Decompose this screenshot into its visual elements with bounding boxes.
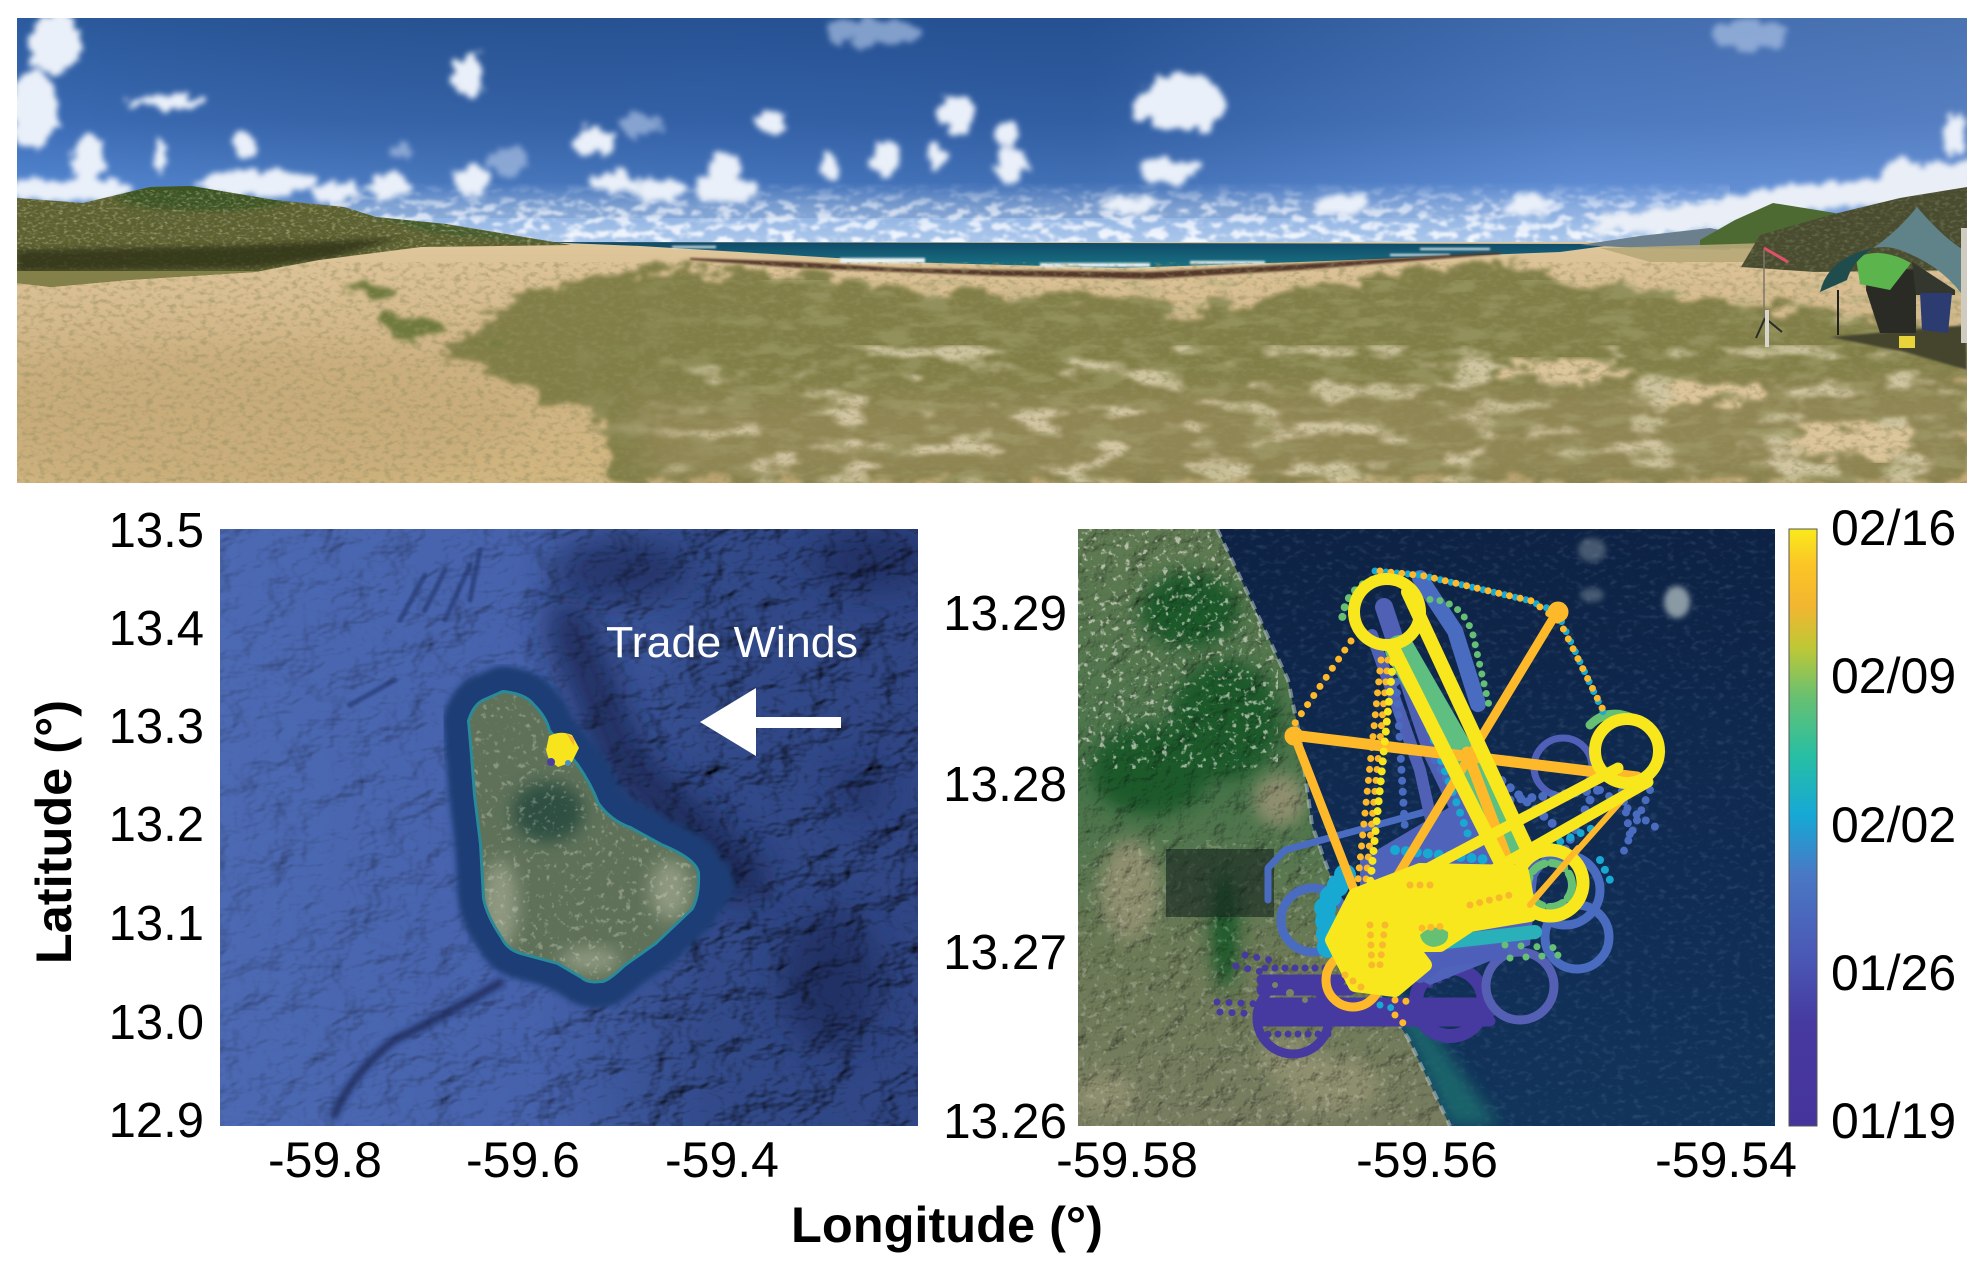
grass meadow	[440, 263, 1967, 483]
cyan halo west	[1325, 875, 1345, 950]
northern ridge fan	[350, 550, 480, 705]
right scrub slope	[1730, 180, 1970, 275]
orange tracks	[1285, 602, 1640, 1025]
right-hand cloud bank	[1590, 156, 1975, 232]
seafloor background	[220, 529, 918, 1126]
ocean background	[1078, 529, 1775, 1126]
lower-left sand tone	[20, 370, 478, 459]
ocean	[540, 242, 1620, 268]
small grass patches	[338, 280, 510, 351]
southern settlements	[1078, 840, 1418, 1126]
surf	[672, 246, 1490, 267]
green tracks	[1342, 580, 1640, 958]
blue fringe below mass	[1420, 952, 1500, 975]
occupants	[1866, 265, 1916, 333]
dark mottling	[560, 280, 1967, 483]
right interior	[1912, 262, 1955, 295]
east tip light	[650, 860, 690, 920]
land shading	[1078, 529, 1478, 1126]
left map latitude ticks: 13.1	[109, 897, 204, 951]
west coast light	[482, 860, 518, 950]
south-west ridge	[333, 981, 503, 1118]
chair	[1920, 293, 1952, 333]
colour bar	[1789, 529, 1817, 1126]
y-axis title: Latitude (°)	[25, 700, 82, 964]
island coastal teal	[470, 693, 697, 980]
left map latitude ticks: 12.9	[109, 1094, 204, 1148]
lower meadow tone	[620, 380, 1967, 483]
tent shadow	[1829, 325, 1967, 370]
person	[1961, 228, 1967, 343]
colour bar date labels	[1831, 500, 1956, 1149]
colour bar date labels: 02/09	[1831, 648, 1956, 704]
cyan and teal tracks	[1325, 730, 1610, 1010]
purple band	[1262, 980, 1490, 1021]
dark seafloor zone	[550, 530, 930, 1050]
surf line	[1217, 529, 1450, 1126]
left map latitude ticks: 13.0	[109, 996, 204, 1050]
sky tone variation	[17, 18, 1967, 218]
right map longitude ticks	[1056, 1132, 1797, 1188]
interior forest	[512, 782, 584, 842]
dark tile	[1166, 849, 1274, 917]
right map longitude ticks: -59.58	[1056, 1132, 1198, 1188]
land	[1075, 529, 1478, 1126]
sand patches in grass	[1500, 362, 1910, 458]
colour bar date labels: 01/26	[1831, 945, 1956, 1001]
dark panel	[1820, 248, 1873, 292]
sandy mottling	[560, 345, 1967, 483]
right map latitude ticks: 13.27	[943, 925, 1067, 980]
blue loops	[1268, 578, 1660, 1020]
right green hill	[1700, 203, 1860, 250]
colour bar date labels: 02/02	[1831, 797, 1956, 853]
arrow: wind direction	[700, 688, 841, 756]
right map latitude ticks: 13.26	[943, 1094, 1067, 1149]
lobe interior	[1420, 928, 1448, 947]
outer survey polygon, dotted	[1295, 571, 1606, 880]
left map latitude ticks: 13.4	[109, 602, 204, 656]
orange dots over yellow mass	[1345, 885, 1510, 990]
ground	[17, 242, 1967, 483]
teal shallows	[1372, 985, 1500, 1126]
hill base shadow	[17, 238, 400, 272]
dark-green crest	[115, 183, 295, 211]
ground texture	[17, 262, 1967, 483]
right map latitude ticks: 13.29	[943, 586, 1067, 641]
left map longitude ticks: -59.4	[665, 1132, 779, 1188]
crest to headland	[330, 204, 570, 246]
land gaps in purple cluster	[1272, 982, 1308, 1003]
dense blue fill	[1360, 795, 1540, 985]
ring interior colour	[1420, 848, 1578, 947]
left map longitude ticks: -59.8	[268, 1132, 382, 1188]
right map longitude ticks: -59.56	[1356, 1132, 1498, 1188]
hill fringe	[17, 271, 257, 289]
flight tracks	[1217, 571, 1660, 1054]
right map longitude ticks: -59.54	[1655, 1132, 1797, 1188]
colour bar date labels: 02/16	[1831, 500, 1956, 556]
tent canopy	[1873, 207, 1967, 300]
left map latitude ticks: 13.3	[109, 700, 204, 754]
forest	[1090, 572, 1280, 990]
left map latitude ticks	[109, 504, 204, 1148]
purple tracks	[1217, 955, 1490, 1054]
left map latitude ticks: 13.2	[109, 798, 204, 852]
sea clouds	[1578, 538, 1690, 618]
faint high clouds	[389, 19, 1790, 175]
x-axis title: Longitude (°)	[791, 1196, 1103, 1253]
villages	[1078, 529, 1278, 769]
tripod mast	[1756, 248, 1788, 347]
right map latitude ticks: 13.28	[943, 757, 1067, 812]
label: Trade Winds: Trade Winds	[606, 618, 858, 667]
left map longitude ticks: -59.6	[466, 1132, 580, 1188]
panel: beach panorama photograph	[0, 13, 1975, 490]
north-east scarp	[568, 625, 745, 880]
survey area marker	[546, 733, 579, 767]
green panel	[1856, 253, 1911, 290]
right map latitude ticks	[943, 586, 1067, 1149]
bucket	[1899, 336, 1915, 348]
ocean ripple	[1200, 529, 1775, 1126]
pale plain under hills	[1600, 242, 1800, 262]
hill texture dark	[17, 190, 577, 290]
left map latitude ticks: 13.5	[109, 504, 204, 558]
left map longitude ticks	[268, 1132, 779, 1188]
south light	[560, 948, 620, 972]
panel: local flight track map	[1075, 529, 1775, 1126]
left hill	[17, 180, 577, 290]
legs	[1837, 290, 1839, 335]
colour bar date labels: 01/19	[1831, 1093, 1956, 1149]
speckled towns	[460, 685, 705, 985]
right distant hill	[1580, 228, 1730, 250]
meadow mottling	[560, 280, 1967, 483]
arid land	[1075, 774, 1380, 1117]
yellow central band	[1332, 870, 1530, 990]
sky	[17, 18, 1967, 246]
clouds	[6, 13, 1966, 215]
seaweed line	[690, 252, 1500, 279]
horizon cloud band	[330, 182, 1730, 245]
shaded seafloor relief	[220, 529, 918, 1126]
purple west cluster	[1265, 968, 1330, 1034]
yellow tracks	[1332, 579, 1659, 990]
island land	[460, 685, 705, 985]
hill texture light	[17, 190, 577, 270]
island shelf	[470, 693, 734, 980]
tent	[1820, 207, 1967, 348]
panel: regional satellite map of Barbados	[220, 529, 930, 1126]
